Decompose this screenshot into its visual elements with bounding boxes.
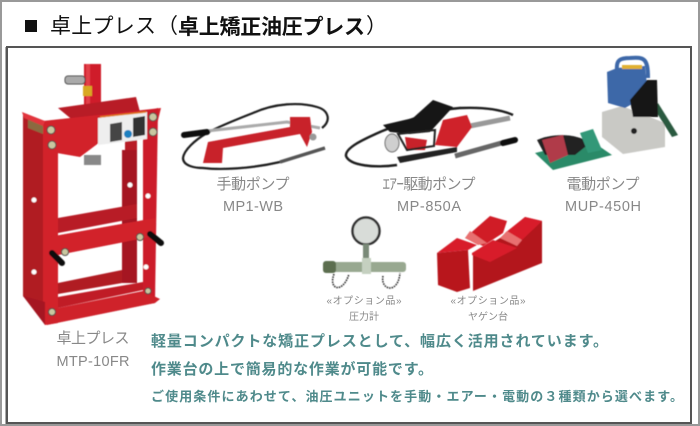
title: （ <box>157 15 178 38</box>
rear legs and side plates <box>23 114 44 323</box>
description text <box>151 332 683 404</box>
label: pressure gauge <box>326 295 402 323</box>
product: air driven pump <box>346 100 515 166</box>
label: V-block <box>450 295 526 323</box>
label: bench press <box>56 330 130 370</box>
label: V-block: «オプション品» <box>450 295 526 307</box>
description text: 作業台の上で簡易的な作業が可能です。 <box>151 360 433 378</box>
label: electric pump <box>565 176 641 215</box>
label: air driven pump: MP-850A <box>397 199 461 215</box>
black frame <box>398 130 435 150</box>
power unit base <box>602 106 665 154</box>
description text: 軽量コンパクトな矯正プレスとして、幅広く活用されています。 <box>151 332 608 350</box>
option: V-block <box>437 216 542 292</box>
hose <box>183 104 328 169</box>
label: air driven pump: ｴｱｰ駆動ポンプ <box>382 176 476 193</box>
label: bench press: MTP-10FR <box>56 354 130 370</box>
label: V-block: ヤゲン台 <box>468 310 508 323</box>
title: 卓上矯正油圧プレス <box>178 16 365 39</box>
title: 卓上プレス <box>50 15 156 38</box>
label: manual pump: 手動ポンプ <box>216 176 290 193</box>
label: electric pump: MUP-450H <box>565 199 641 215</box>
handles <box>52 234 161 263</box>
title <box>25 15 387 39</box>
foot switch <box>535 129 612 170</box>
bolts <box>47 113 157 149</box>
handle <box>207 122 320 131</box>
option: pressure gauge <box>323 218 406 288</box>
black valve block <box>630 80 658 117</box>
label: pressure gauge: 圧力計 <box>349 310 379 323</box>
red tank <box>435 115 472 147</box>
leg holes <box>32 182 150 274</box>
product: electric pump <box>535 58 678 170</box>
hose <box>346 108 513 166</box>
label: air driven pump <box>382 176 476 215</box>
base <box>397 147 457 163</box>
base <box>23 296 45 325</box>
product: bench press <box>22 64 161 325</box>
foot pedal <box>383 100 453 134</box>
front legs <box>43 125 58 325</box>
silver pipes <box>470 118 510 126</box>
product: manual pump <box>183 104 328 169</box>
rear cross member <box>58 204 137 233</box>
label: manual pump: MP1-WB <box>223 199 283 215</box>
title: ） <box>366 15 387 38</box>
blue motor <box>607 66 648 108</box>
adjustable bed <box>43 218 155 258</box>
lower rail <box>58 270 122 294</box>
label: bench press: 卓上プレス <box>56 330 130 347</box>
top beam <box>43 108 161 157</box>
description text: ご使用条件にあわせて、油圧ユニットを手動・エアー・電動の３種類から選べます。 <box>151 389 683 404</box>
label: pressure gauge: «オプション品» <box>326 295 402 307</box>
hydraulic cylinder <box>65 64 101 165</box>
pump body <box>203 117 312 163</box>
label: manual pump <box>216 176 290 215</box>
valve <box>385 134 399 152</box>
label: electric pump: 電動ポンプ <box>566 176 640 193</box>
safety label <box>98 112 147 145</box>
